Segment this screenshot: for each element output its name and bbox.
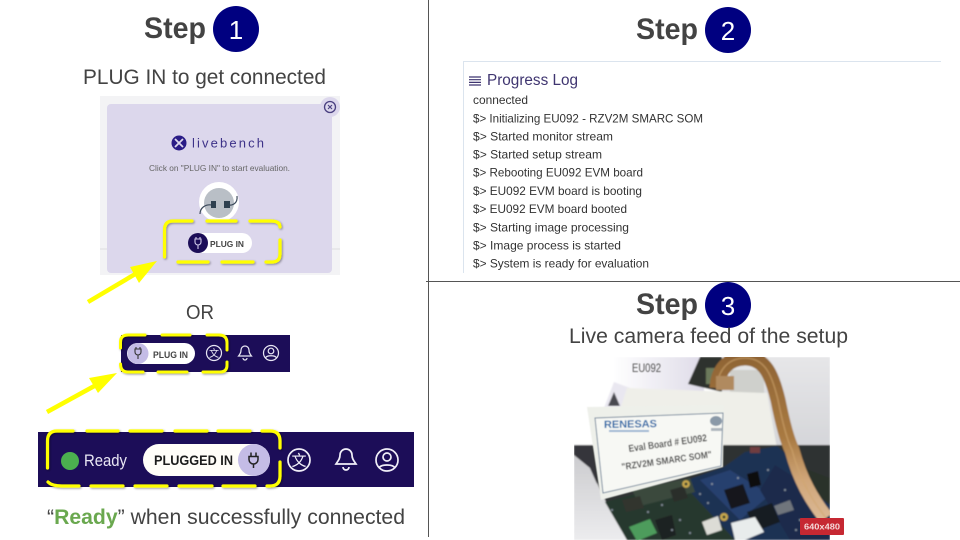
icon: language: 文 [209,347,219,360]
text: ready caption: “Ready” when successfully connected [47,505,405,529]
title: progress log: Progress Log [487,72,578,89]
text: or: OR [186,302,214,324]
arrow: to dialog button [88,261,157,302]
icon: language [206,346,222,360]
log lines: $> EU092 EVM board is booting [473,184,642,198]
panel: progress log [464,62,941,273]
log lines: $> Image process is started [473,238,621,252]
panel dividers [426,0,960,537]
heading: step 1 [144,6,259,52]
status: ready [61,452,128,470]
log lines: $> Started setup stream [473,148,602,162]
text: plug in instruction: PLUG IN to get connected [83,65,326,89]
card: eval board label: "RZV2M SMARC SOM" [621,449,713,473]
log lines: $> System is ready for evaluation [473,257,649,271]
button: plug in pill [127,343,195,364]
panel: step 2 [464,7,941,273]
badge: resolution [800,518,844,535]
log lines: $> EU092 EVM board booted [473,202,627,216]
button: plugged in pill [143,444,270,476]
heading: step 1: 1 [229,15,243,45]
card: eval board label [587,405,724,500]
log lines: $> Starting image processing [473,220,629,234]
heading: step 2: 2 [721,16,735,46]
highlight: dashed box around plug in button [164,221,280,262]
highlight: dashed box around small nav button [120,335,227,372]
panel: step 1 [38,6,414,529]
button: plug in pill: PLUG IN [153,350,188,361]
text: camera caption: Live camera feed of the setup [569,324,848,348]
heading: step 2: Step [636,13,698,46]
highlight: dashed box around ready status [48,431,280,486]
screenshot: livebench plug in dialog [100,96,340,275]
card: eval board label: Eval Board # EU092 [628,433,708,455]
log lines: $> Rebooting EU092 EVM board [473,166,643,180]
button: plug in [188,233,252,253]
panel: step 3 [569,282,848,540]
icon: user [376,449,398,471]
heading: step 2 [636,7,751,53]
heading: step 3 [636,282,751,328]
heading: step 3: 3 [721,291,735,321]
screenshot: large nav bar [38,432,414,487]
log lines [473,93,703,271]
icon: language [288,449,310,471]
badge: resolution: 640x480 [804,522,840,532]
icon: user [264,346,278,360]
heading: step 3: Step [636,288,698,321]
label: EU092: EU092 [632,363,661,375]
log lines: $> Initializing EU092 - RZV2M SMARC SOM [473,111,703,125]
chips and connectors [611,469,801,540]
icon: language: 文 [291,452,307,470]
button: plugged in pill: PLUGGED IN [154,452,233,468]
log lines: connected [473,93,528,107]
icon: bell [336,449,356,470]
button: plug in: PLUG IN [210,239,244,249]
icon: plug illustration [199,182,239,222]
icon: bell [238,346,252,360]
status: ready: Ready [84,452,128,470]
arrow: to small nav button [47,373,117,412]
ribbon cable [717,358,826,518]
icon: list [469,77,481,85]
photo: live camera feed of evaluation board [574,357,830,540]
text: dialog prompt: Click on "PLUG IN" to start evaluation. [149,163,290,173]
icon: close button [320,97,340,117]
card: eval board label: RENESAS [604,418,657,431]
logo: livebench: livebench [192,136,264,150]
log lines: $> Started monitor stream [473,130,613,144]
heading: step 1: Step [144,12,206,45]
screenshot: small nav bar [121,335,290,372]
